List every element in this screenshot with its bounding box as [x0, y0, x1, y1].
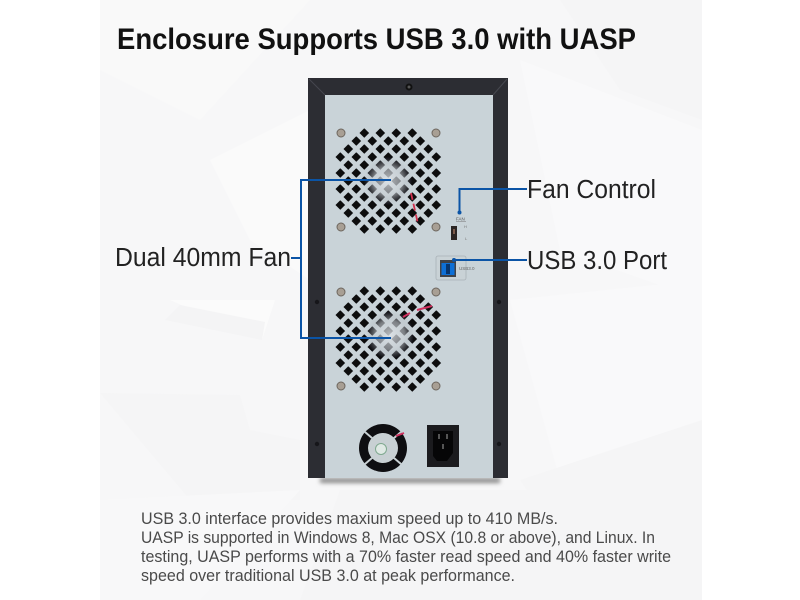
- enclosure rear panel: [308, 78, 508, 483]
- description text: USB 3.0 interface provides maxium speed up to 410 MB/s.: [141, 510, 558, 528]
- description text: UASP is supported in Windows 8, Mac OSX (10.8 or above), and Linux. In: [141, 529, 655, 547]
- background: low-poly panel: [100, 0, 702, 600]
- description text: [141, 510, 671, 585]
- fan switch: [451, 216, 468, 241]
- USB 3.0 socket: USB3.0: [459, 266, 475, 271]
- callout lines: dual fan bracket: [291, 180, 391, 338]
- fan switch: FAN: [456, 216, 465, 222]
- description text: speed over traditional USB 3.0 at peak performance.: [141, 567, 515, 585]
- callout line: USB port: [452, 258, 527, 262]
- lower fan grille: [335, 286, 442, 392]
- outer frame: [308, 78, 508, 478]
- frame screws: [315, 84, 501, 446]
- PSU fan: [359, 424, 407, 472]
- label: USB 3.0 port: USB 3.0 Port: [527, 247, 667, 275]
- description text: testing, UASP performs with a 70% faster read speed and 40% faster write: [141, 548, 671, 566]
- title: Enclosure Supports USB 3.0 with UASP: [117, 23, 636, 56]
- fan switch: H: [464, 224, 467, 229]
- fan switch: L: [465, 236, 468, 241]
- power inlet: [427, 425, 459, 467]
- USB 3.0 socket: [436, 256, 475, 280]
- shadow under enclosure: [320, 478, 500, 483]
- upper fan grille: [335, 128, 442, 234]
- callout line: fan control: [458, 189, 527, 214]
- label: fan control: Fan Control: [527, 176, 656, 204]
- label: dual 40mm fan: Dual 40mm Fan: [115, 244, 291, 272]
- metal back plate: [325, 95, 493, 478]
